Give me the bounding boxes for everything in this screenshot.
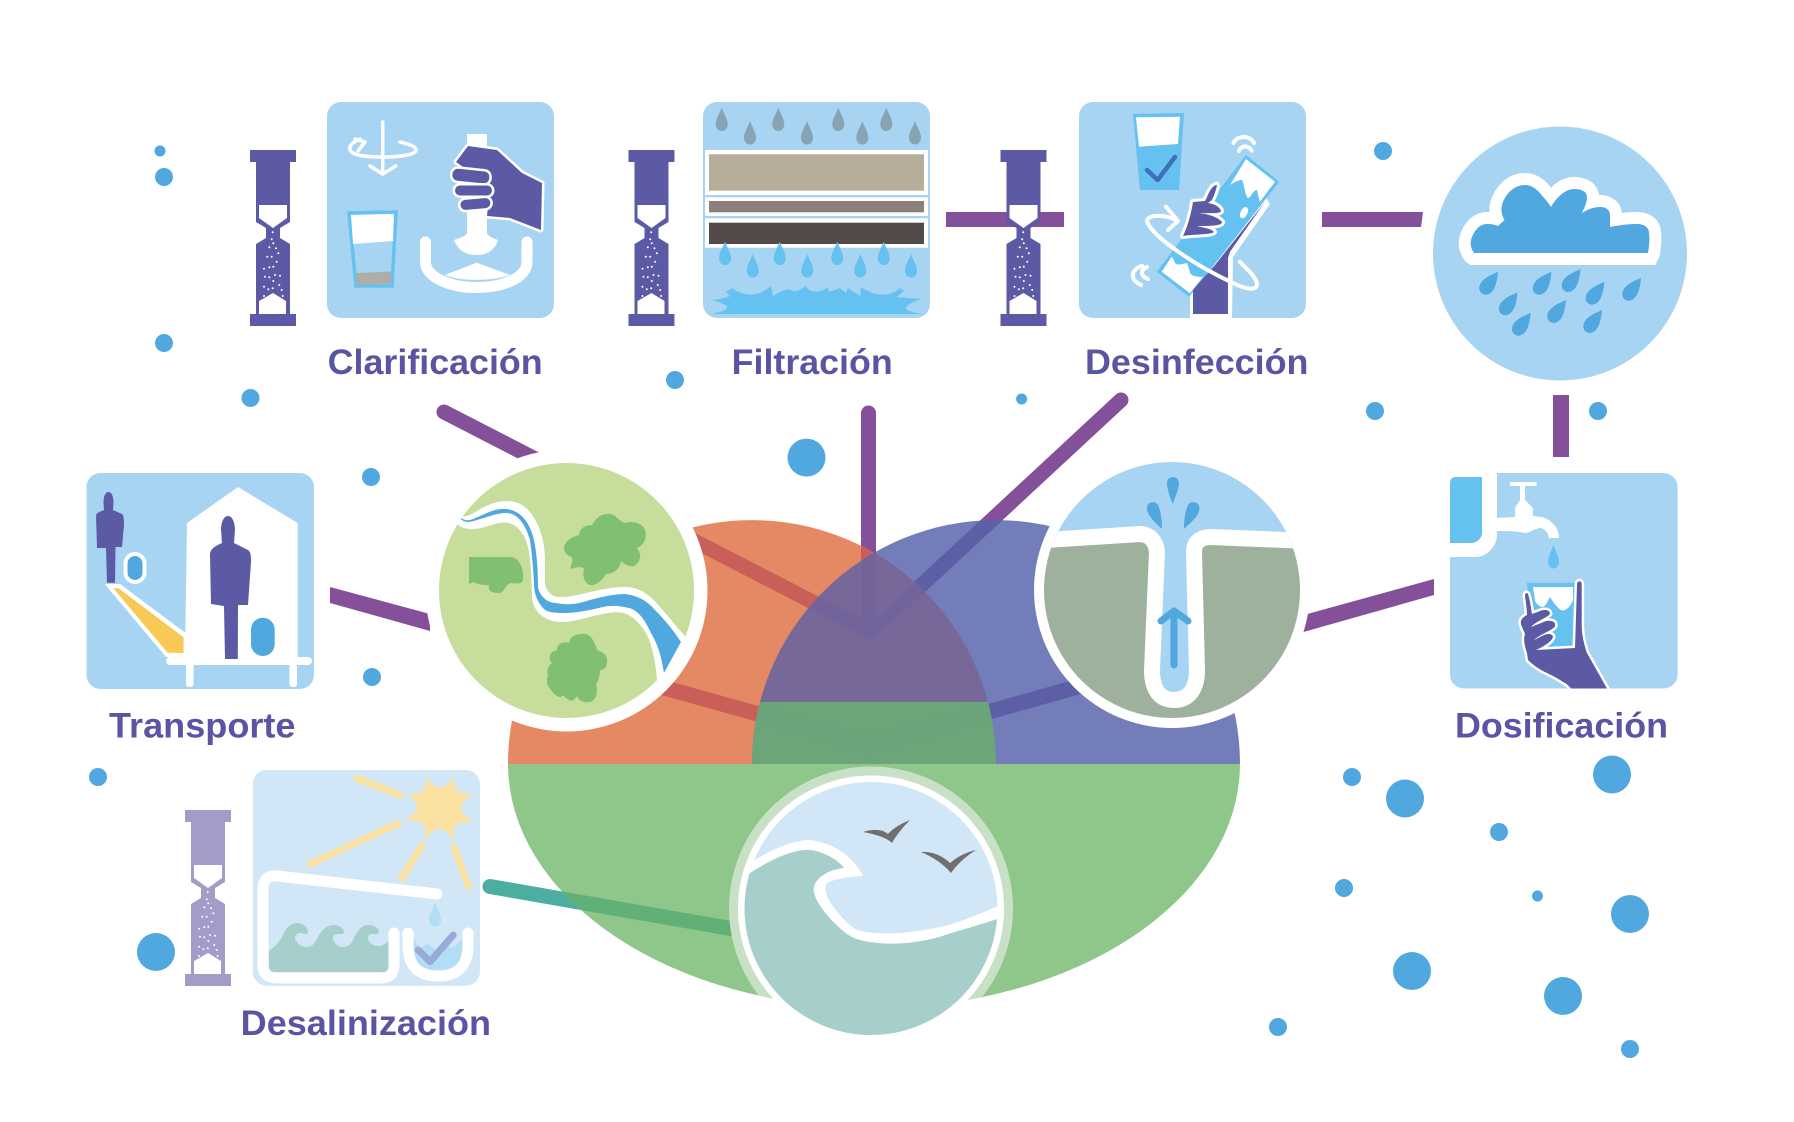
hourglass 4 [185,810,231,986]
tree bottom [547,634,607,702]
icon: fresh water bowl [408,933,468,976]
pale ring [729,766,1013,1000]
hourglass 3 [1000,150,1046,326]
cloud [1471,185,1649,253]
venn: orange lobe [508,520,996,764]
icon: person small [96,492,124,583]
blue drops [719,242,917,278]
tree top right [564,514,646,585]
label: clarificación: Clarificación [328,343,543,382]
lines crossing the blue lobe [756,520,1081,719]
label: desinfección: Desinfección [1085,343,1308,382]
central venn diagram [508,520,1240,1000]
teal connector from desalination [490,886,745,931]
sky [744,782,998,1035]
connector lines outside the central shapes [330,212,1569,633]
river circle [426,450,708,732]
label: filtración: Filtración [732,343,893,382]
lines crossing the lens [752,552,996,764]
icon: ramp [105,584,187,657]
water drops [1147,477,1200,529]
icon: glass [1527,583,1575,650]
teal line on green [562,891,732,936]
grey drops [716,108,921,144]
label: transporte: Transporte [109,706,296,746]
well circle [1034,462,1308,728]
icon: arm [1193,202,1265,314]
cloud circle [1433,126,1687,380]
panel: dosificación [1445,465,1678,688]
icon: house [185,487,298,657]
splash [710,286,924,314]
sea circle [729,766,1013,1050]
venn: green lower lobe [508,764,1240,1008]
icon: tank outline [263,876,437,978]
panel: desalinización [253,770,480,986]
icon: hand holding bottle [1183,185,1222,236]
river water [458,509,681,673]
icon: small bag [126,554,144,582]
icon: platform [166,657,312,687]
hourglass 1 [250,150,296,326]
icon: sun [310,774,475,886]
filter layers [705,150,928,248]
wave [740,840,1000,1040]
panel: desinfección [1079,102,1306,318]
cloud base [1462,240,1661,265]
panel: transporte [86,473,314,689]
upward arrow [1161,611,1188,665]
venn: blue lobe [752,520,1240,764]
arm outline [1190,198,1270,318]
icon: glass with sediment [349,212,396,286]
icon: large bag [251,618,275,656]
hourglass 2 [628,150,674,326]
icon: tap [1497,482,1559,538]
venn: overlap lens [752,553,996,764]
field [469,557,523,593]
icon: pestle [454,134,498,255]
white pipe [1445,465,1497,557]
icon: sea in tank [269,923,389,972]
icon: person large [210,516,251,659]
lines crossing the orange lobe [662,533,874,722]
icon: glass with check [1133,113,1184,190]
panel: clarificación [327,102,554,318]
icon: rotation ring [1133,137,1257,289]
icon: hand with glass [1521,581,1607,688]
icon: hand [452,146,542,230]
tank [1450,477,1482,543]
scattered water dots [89,142,1649,1058]
icon: water bottle [1157,155,1279,297]
ground [1044,530,1300,718]
label: desalinización: Desalinización [241,1004,491,1043]
label: dosificación: Dosificación [1455,706,1668,746]
icon: bowl with sediment [426,242,527,288]
rain [1479,269,1641,336]
panel: filtración [703,102,930,318]
icon: rotation arrow [350,122,416,174]
water drop [429,903,441,927]
river white banks [457,501,690,690]
birds [863,820,976,873]
water drop [1548,545,1559,568]
sky and shaft [1051,462,1293,708]
